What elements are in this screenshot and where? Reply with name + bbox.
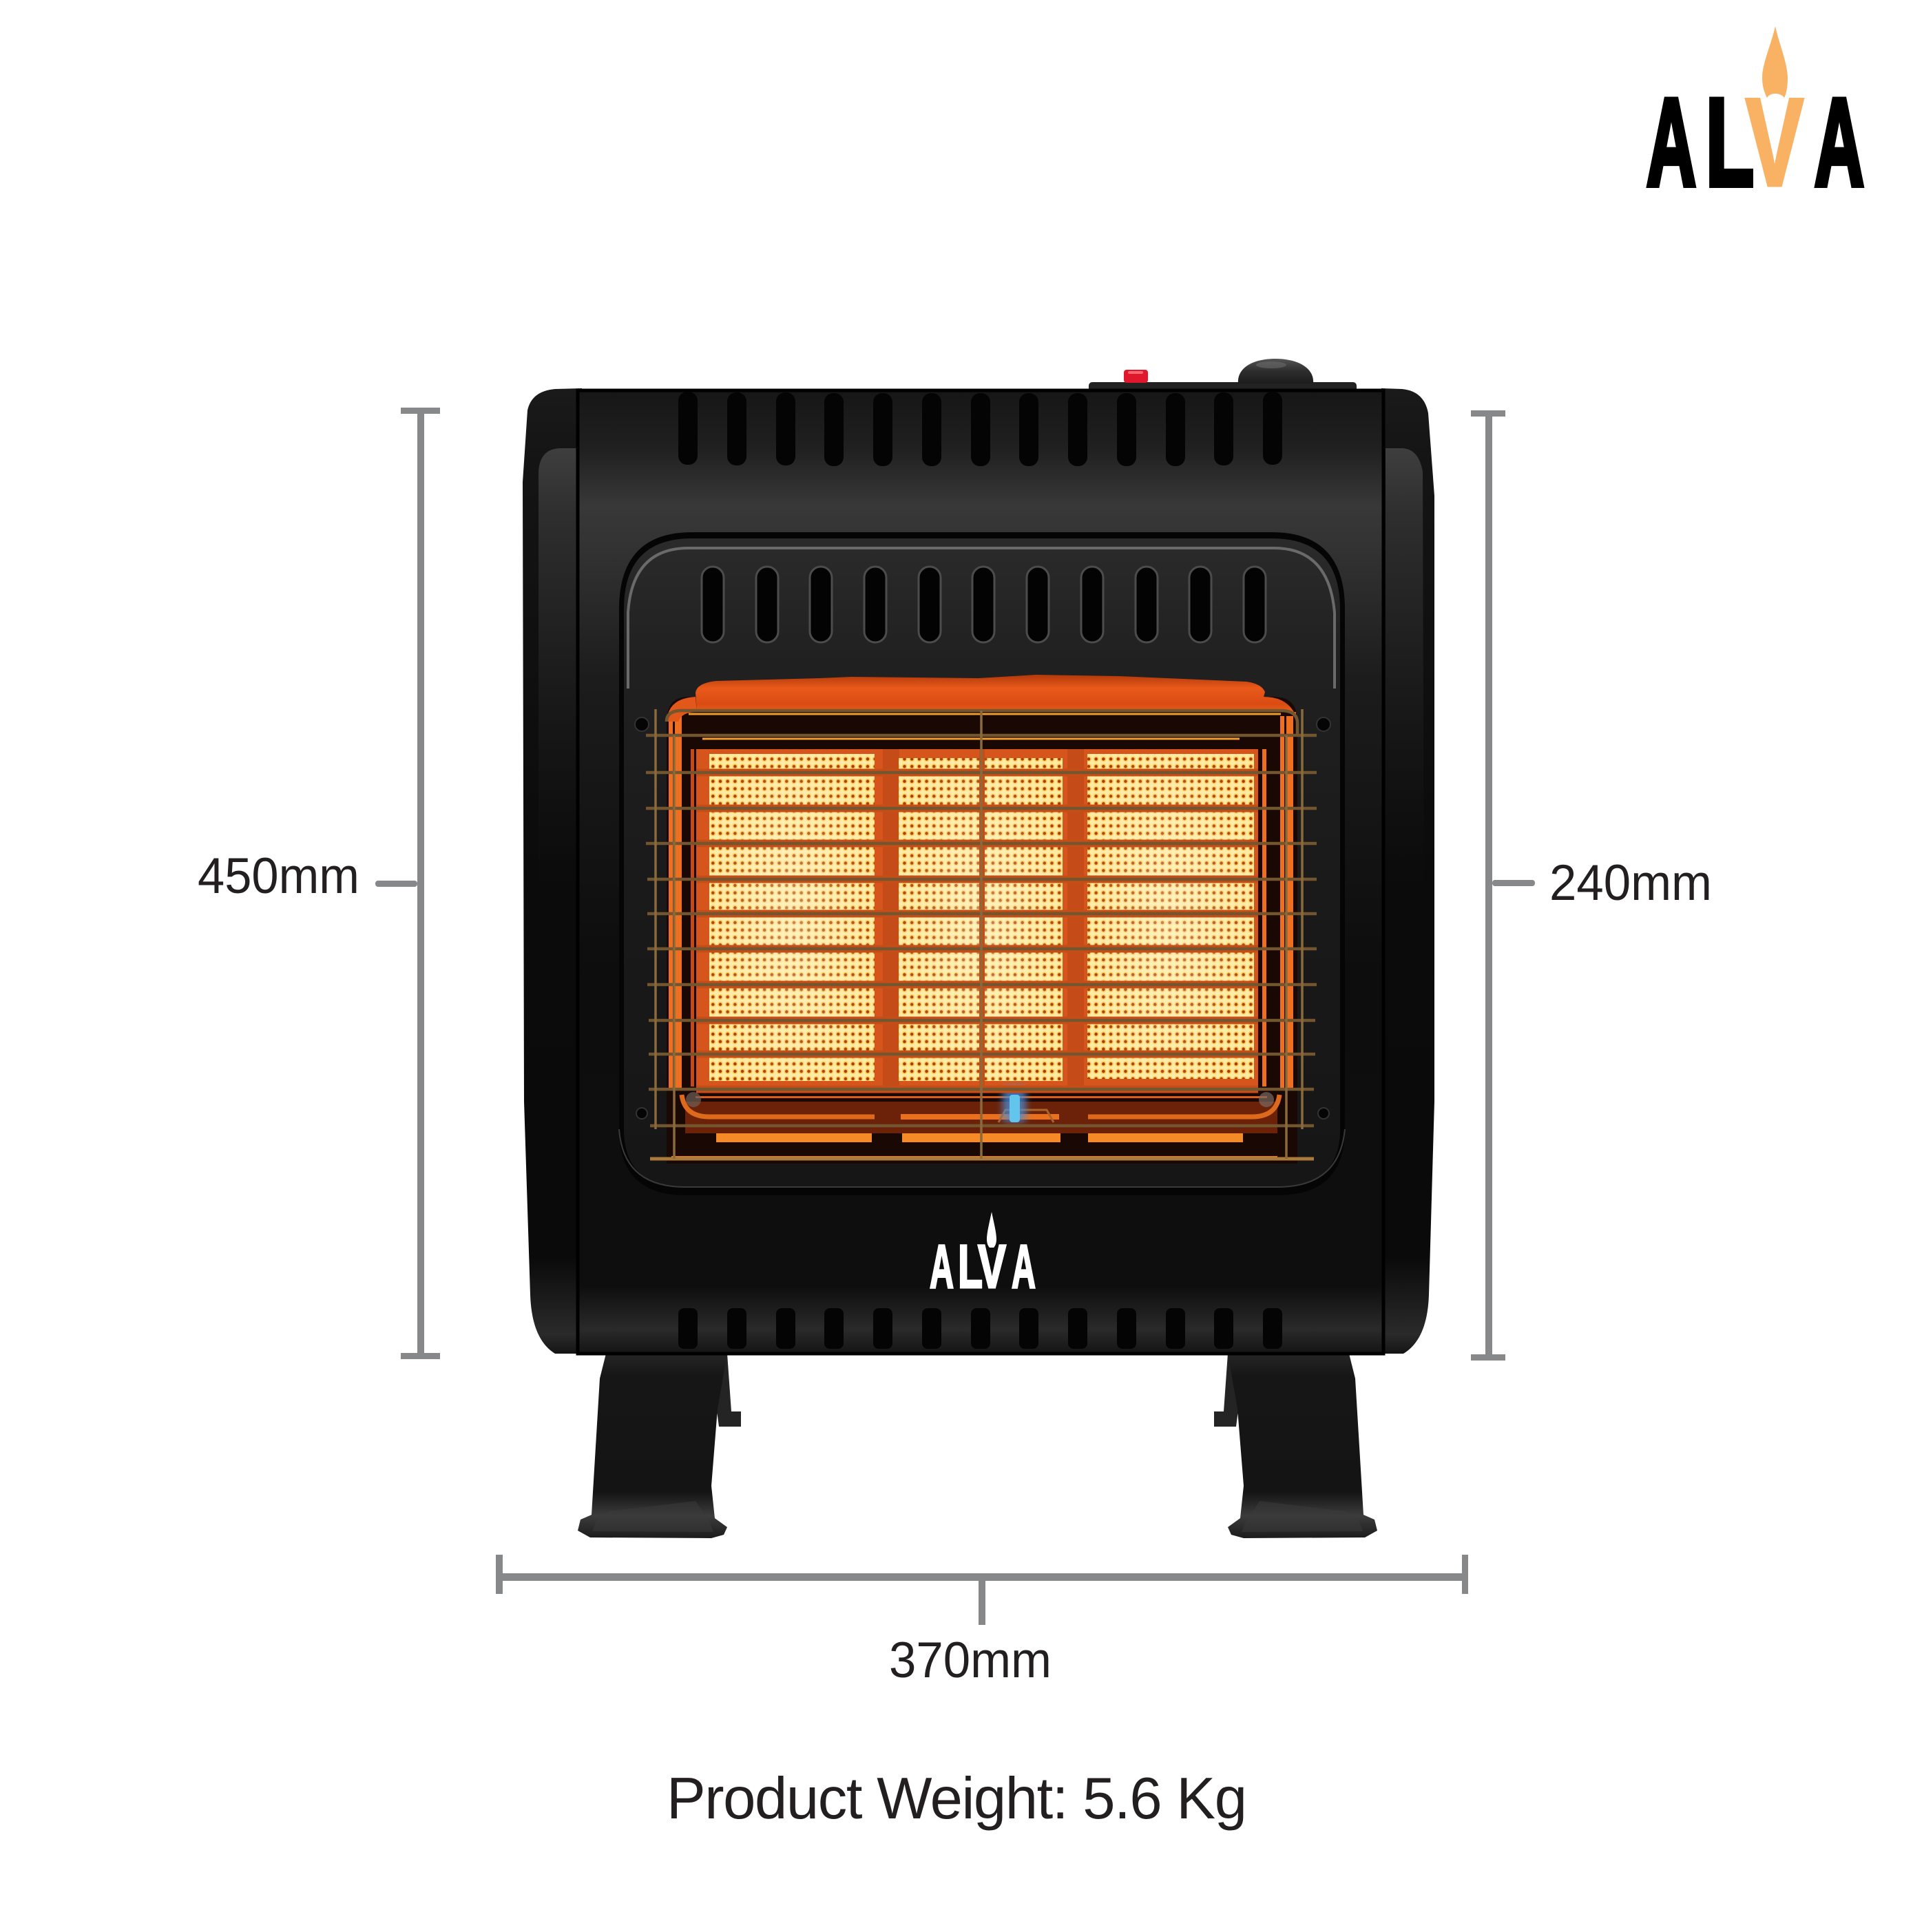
width dimension bracket (bottom)	[496, 1555, 1468, 1625]
inner vent slots	[702, 567, 1266, 642]
logo flame	[1762, 26, 1788, 98]
heater badge logo	[930, 1212, 1036, 1301]
lower reflector streaks	[671, 1092, 1279, 1158]
label: 370mm: 370mm	[889, 1632, 1052, 1688]
guard glow bands	[696, 773, 1258, 1089]
orange side wall strips	[669, 716, 1293, 1088]
orange reflection lines	[689, 714, 1281, 739]
bottom vent slots	[678, 1308, 1282, 1349]
pilot flame	[999, 1086, 1054, 1122]
guard wires	[646, 711, 1317, 1126]
logo wordmark: V	[1746, 73, 1804, 212]
label: 450mm: 450mm	[198, 848, 359, 904]
heater badge logo: A	[930, 1232, 954, 1301]
side mounting hooks	[635, 717, 1330, 1119]
heater badge logo: A	[1012, 1232, 1036, 1301]
body: front panel	[578, 390, 1383, 1354]
logo wordmark: A	[1815, 73, 1864, 212]
control knob	[1238, 359, 1313, 384]
logo wordmark	[1647, 73, 1864, 212]
heater badge logo: L	[958, 1232, 983, 1301]
wire safety guard	[646, 709, 1317, 1159]
right leg	[1214, 1354, 1377, 1538]
control plate	[1089, 382, 1357, 392]
product weight caption: Product Weight: 5.6 Kg	[667, 1766, 1247, 1831]
red indicator button	[1124, 370, 1148, 383]
ceramic panels with perforation	[709, 754, 1254, 1081]
heater	[523, 359, 1434, 1538]
top vent slots	[678, 392, 1282, 466]
glowing burner bowl	[667, 675, 1297, 1164]
ceramic surround	[696, 749, 1258, 1086]
label: 240mm: 240mm	[1549, 855, 1712, 911]
body: right side panel	[1381, 388, 1434, 1354]
left leg	[578, 1354, 741, 1538]
hood reflector	[696, 675, 1296, 716]
heater badge logo: V	[978, 1232, 1006, 1301]
depth dimension bracket (right)	[1471, 410, 1535, 1361]
brand logo: ALVA with flame	[1647, 26, 1864, 212]
logo wordmark: A	[1647, 73, 1696, 212]
body: left side panel	[523, 388, 582, 1354]
logo wordmark: L	[1706, 73, 1754, 212]
burner panel housing	[619, 532, 1345, 1195]
height dimension bracket (left)	[375, 408, 440, 1359]
